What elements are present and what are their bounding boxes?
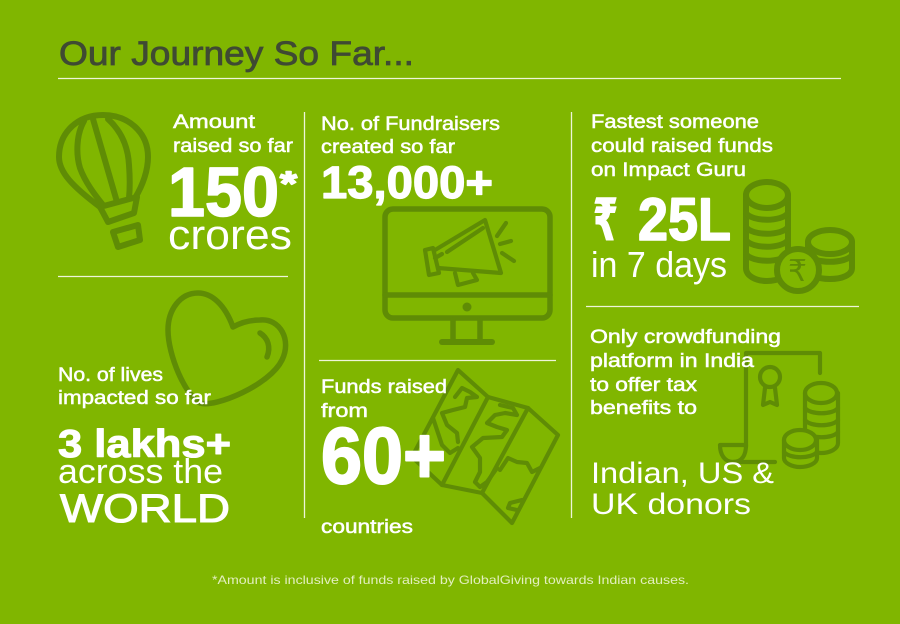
tax value <box>591 457 774 521</box>
icon: world map <box>412 370 558 523</box>
fundraisers value: 13,000+ <box>321 157 493 208</box>
lives value: WORLD <box>60 487 230 531</box>
tax label: platform in India <box>590 351 755 372</box>
fundraisers label <box>321 114 500 158</box>
icon: coin stacks <box>746 182 852 291</box>
amount value: * <box>280 165 298 203</box>
panel: fastest fundraiser <box>591 112 852 291</box>
lives label: No. of lives <box>58 365 163 386</box>
tax label: benefits to <box>590 398 697 419</box>
fastest value: 25L <box>638 186 731 253</box>
tax value: Indian, US & <box>591 457 774 490</box>
countries label top: Funds raised <box>321 377 447 398</box>
panel: lives impacted <box>58 293 286 531</box>
countries label top <box>321 377 447 422</box>
countries value: 60+ <box>321 411 446 500</box>
tax label: to offer tax <box>590 375 698 396</box>
fastest label: Fastest someone <box>591 112 759 133</box>
panel: amount raised <box>59 112 298 258</box>
tax value: UK donors <box>591 488 751 521</box>
panel: fundraisers created <box>321 114 550 342</box>
panel: funds raised from countries <box>321 370 558 538</box>
amount label <box>173 112 294 157</box>
icon: heart <box>168 293 286 404</box>
fastest value: ₹ <box>593 186 618 254</box>
fundraisers label: No. of Fundraisers <box>321 114 500 135</box>
amount value: 150 <box>168 153 279 231</box>
lives label <box>58 365 212 409</box>
amount value <box>168 153 298 258</box>
lives label: impacted so far <box>58 388 212 409</box>
footnote: *Amount is inclusive of funds raised by GlobalGiving towards Indian causes. <box>212 573 689 587</box>
fastest value: in 7 days <box>591 244 727 285</box>
lives value: across the <box>58 453 223 491</box>
icon: certificate and coins <box>720 353 838 467</box>
amount label: raised so far <box>173 136 294 157</box>
icon: hot air balloon <box>59 115 148 247</box>
lives value <box>58 423 231 531</box>
tax label <box>590 327 781 419</box>
fastest label: could raised funds <box>591 136 773 157</box>
panel: tax benefits <box>590 327 838 521</box>
tax label: Only crowdfunding <box>590 327 781 348</box>
icon: coin stacks: ₹ <box>788 254 807 289</box>
lives value: 3 lakhs+ <box>58 423 231 466</box>
fundraisers label: created so far <box>321 137 456 158</box>
amount label: Amount <box>173 112 256 133</box>
fastest label: on Impact Guru <box>591 160 746 181</box>
fastest label <box>591 112 773 181</box>
countries label top: from <box>321 401 368 422</box>
icon: monitor with megaphone <box>385 209 550 342</box>
fastest value <box>591 186 731 285</box>
amount value: crores <box>168 211 292 258</box>
title: Our Journey So Far... <box>59 35 414 73</box>
countries label bottom: countries <box>321 517 413 538</box>
